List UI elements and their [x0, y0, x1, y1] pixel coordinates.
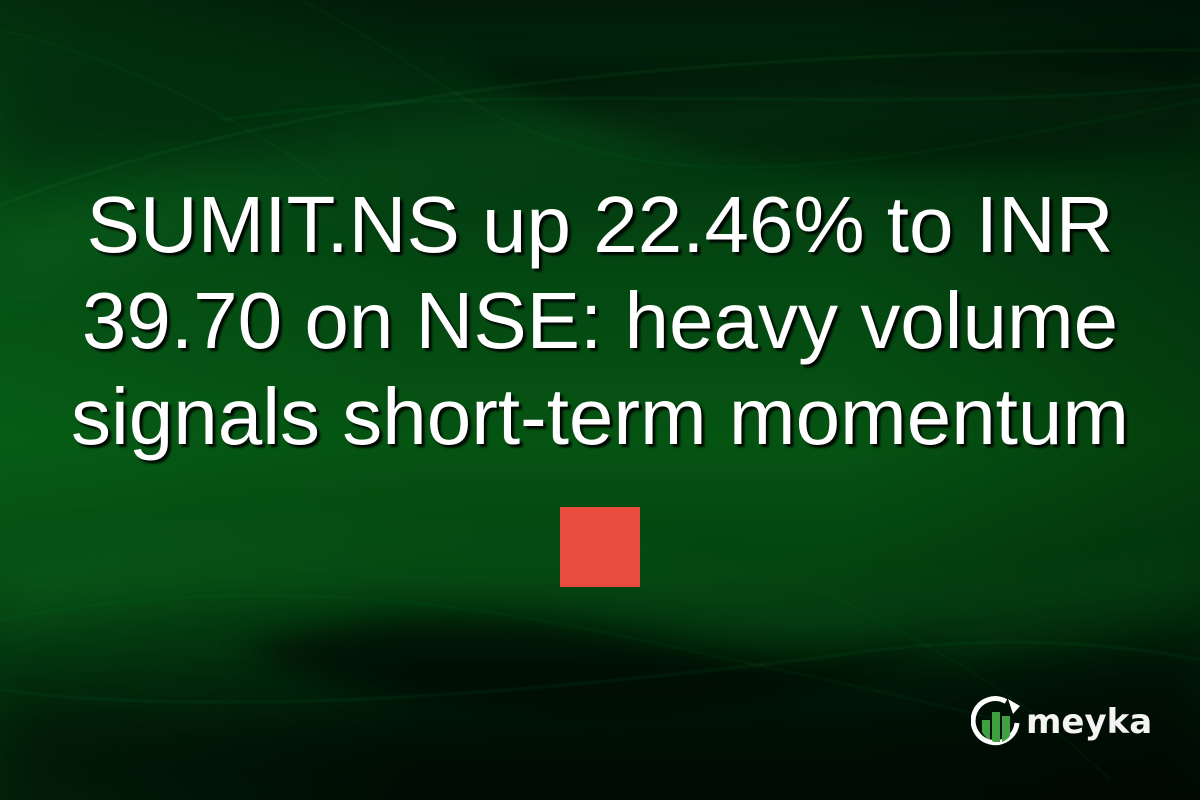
logo: meyka	[971, 696, 1152, 746]
title: signals short-term momentum	[71, 372, 1129, 461]
title	[71, 180, 1129, 465]
title: SUMIT.NS up 22.46% to INR	[86, 180, 1114, 269]
title: 39.70 on NSE: heavy volume	[82, 276, 1118, 365]
icon: circular arrow with bar chart	[971, 696, 1020, 746]
red square	[560, 507, 640, 587]
wordmark: meyka	[1026, 702, 1152, 742]
